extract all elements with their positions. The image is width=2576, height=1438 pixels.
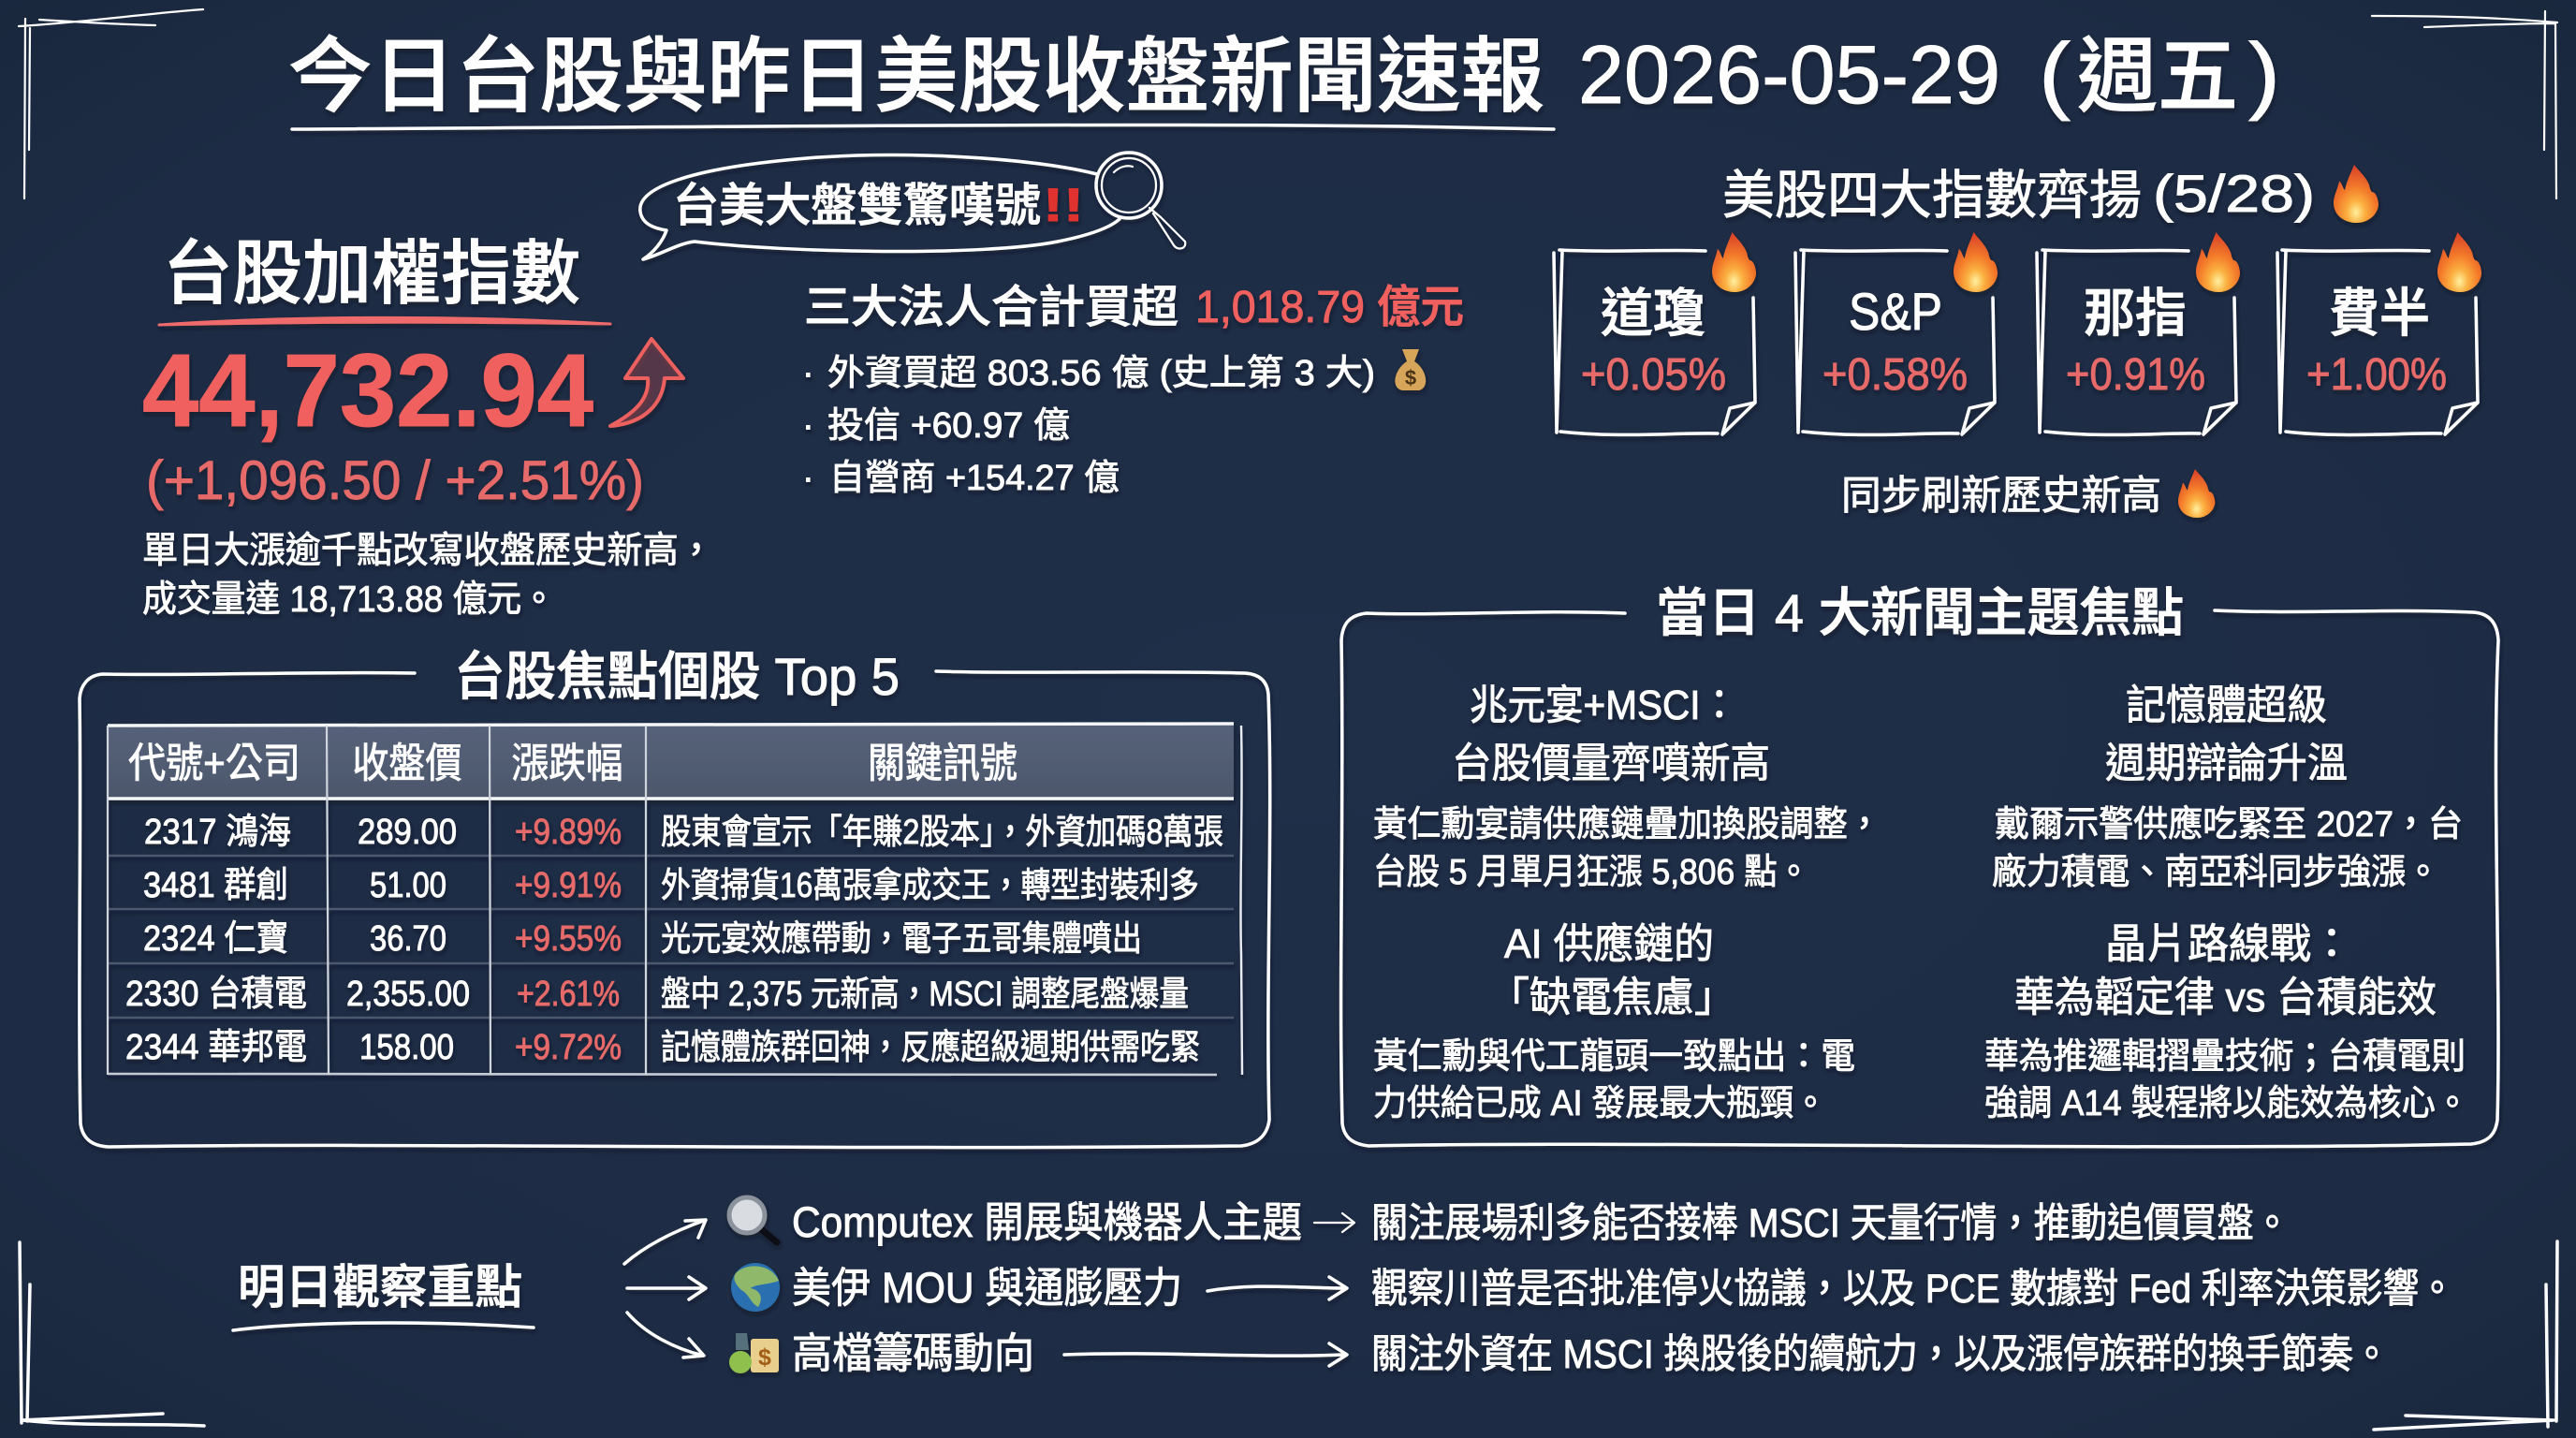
- institutional heading: [804, 283, 1464, 332]
- news: memory: 戴爾示警供應吃緊至 2027，台: [1995, 805, 2463, 844]
- item: MOU: [792, 1264, 2455, 1312]
- row 3: 2324 仁寶: [143, 919, 288, 959]
- icon: money with wings: [729, 1333, 779, 1373]
- news: memory: [1992, 682, 2463, 892]
- card: S&P: +0.58%: [1822, 350, 1968, 400]
- news: memory: 記憶體超級: [2126, 682, 2327, 728]
- row 5: +9.72%: [515, 1028, 622, 1067]
- news: MSCI: 兆元宴+MSCI：: [1470, 682, 1738, 728]
- card: S&P: S&P: [1849, 282, 1942, 341]
- index change: (+1,096.50 / +2.51%): [146, 450, 644, 511]
- title: 2026-05-29: [1578, 28, 2000, 121]
- row 2: [143, 866, 1199, 905]
- icon: money bag: [1395, 349, 1426, 390]
- row 3: +9.55%: [515, 919, 622, 959]
- table header: 代號+公司: [128, 741, 300, 786]
- row 5: [125, 1028, 1200, 1067]
- speech bubble: [640, 155, 1120, 259]
- row 5: 158.00: [359, 1028, 454, 1067]
- bullet list: ·: [802, 459, 814, 498]
- news: chip roadmap: [1984, 921, 2469, 1123]
- row 1: 2317 鴻海: [144, 813, 291, 852]
- item: Computex: [792, 1198, 2291, 1246]
- news: chip roadmap: 華為韜定律 vs 台積能效: [2014, 975, 2437, 1020]
- news: power shortage: 「缺電焦慮」: [1488, 975, 1735, 1020]
- row 4: +2.61%: [517, 975, 620, 1014]
- arrow: to MOU: [627, 1277, 706, 1299]
- news: power shortage: AI 供應鏈的: [1504, 921, 1714, 967]
- row 3: [143, 919, 1142, 959]
- item: MOU: 美伊 MOU 與通膨壓力: [792, 1264, 1182, 1312]
- corner bracket: top right: [2372, 11, 2557, 198]
- card: Dow: 道瓊: [1601, 284, 1705, 343]
- row 5: 2344 華邦電: [125, 1028, 307, 1067]
- row 1: 股東會宣示「年賺2股本」，外資加碼8萬張: [661, 813, 1223, 851]
- card: SOX: [2277, 232, 2481, 434]
- row 2: 3481 群創: [143, 866, 288, 905]
- speech bubble: 台美大盤雙驚嘆號: [673, 181, 1041, 231]
- corner bracket: bottom right: [2374, 1241, 2557, 1430]
- panel: institutional investors: [802, 283, 1464, 498]
- item: chips: 高檔籌碼動向: [792, 1329, 1034, 1377]
- card: Nasdaq: [2037, 232, 2240, 434]
- heading: US indices: (5/28): [2153, 164, 2315, 223]
- arrow: to Computex: [624, 1220, 706, 1264]
- card: SOX: 費半: [2329, 284, 2430, 343]
- row 5: 記憶體族群回神，反應超級週期供需吃緊: [661, 1028, 1200, 1066]
- title: [288, 26, 2280, 123]
- row 4: 2,355.00: [346, 975, 470, 1014]
- heading: taiex: 台股加權指數: [163, 234, 580, 313]
- description: [142, 531, 714, 620]
- news: memory: 廠力積電、南亞科同步強漲。: [1992, 853, 2440, 892]
- table: [108, 724, 1242, 1075]
- item: MOU: 觀察川普是否批准停火協議，以及 PCE 數據對 Fed 利率決策影響。: [1371, 1267, 2455, 1312]
- card: S&P: [1795, 232, 1998, 434]
- heading: news themes: 當日 4 大新聞主題焦點: [1656, 583, 2184, 642]
- icon: money bag: $: [1405, 366, 1416, 389]
- bullet list: ·: [802, 354, 814, 393]
- icon: up arrow: [610, 339, 683, 426]
- heading: US indices: [1722, 164, 2315, 225]
- row 1: [144, 813, 1223, 852]
- institutional heading: 1,018.79 億元: [1195, 283, 1464, 332]
- row 2: +9.91%: [515, 866, 622, 905]
- description: 成交量達 18,713.88 億元。: [142, 580, 556, 620]
- table header: 關鍵訊號: [868, 741, 1017, 786]
- news: power shortage: 力供給已成 AI 發展最大瓶頸。: [1373, 1084, 1827, 1123]
- corner bracket: top left: [19, 9, 203, 198]
- card: Dow: [1554, 232, 1756, 434]
- panel: US indices: [1554, 164, 2481, 519]
- icon: money with wings: $: [758, 1344, 771, 1371]
- institutional heading: 三大法人合計買超: [804, 283, 1178, 332]
- table header: 收盤價: [352, 741, 462, 786]
- description: 單日大漲逾千點改寫收盤歷史新高，: [142, 531, 714, 571]
- table header: 漲跌幅: [511, 741, 623, 786]
- heading: top 5: 台股焦點個股 Top 5: [454, 647, 900, 706]
- news: MSCI: 台股價量齊噴新高: [1452, 741, 1770, 786]
- title: (: [2039, 26, 2071, 122]
- card: Nasdaq: +0.91%: [2066, 350, 2205, 400]
- heading underline: [233, 1323, 534, 1330]
- row 2: 外資掃貨16萬張拿成交王，轉型封裝利多: [661, 866, 1199, 904]
- row 4: [125, 975, 1189, 1014]
- index value: 44,732.94: [142, 333, 593, 448]
- title underline: [292, 125, 1554, 129]
- icon: magnifying glass: [1096, 153, 1185, 248]
- panel: top 5 stocks: [80, 647, 1270, 1148]
- icon: flame: [2334, 165, 2378, 223]
- row 4: 盤中 2,375 元新高，MSCI 調整尾盤爆量: [661, 975, 1189, 1013]
- card: SOX: +1.00%: [2306, 350, 2447, 400]
- news: chip roadmap: 華為推邏輯摺疊技術；台積電則: [1984, 1037, 2466, 1077]
- card: Nasdaq: 那指: [2084, 284, 2187, 343]
- corner bracket: bottom left: [20, 1242, 204, 1426]
- news: power shortage: 黃仁勳與代工龍頭一致點出：電: [1373, 1037, 1855, 1077]
- heading underline: [159, 317, 610, 325]
- news: chip roadmap: 晶片路線戰：: [2105, 921, 2352, 967]
- row 3: 36.70: [370, 919, 446, 959]
- note: record highs: 同步刷新歷史新高: [1841, 474, 2161, 519]
- row 4: 2330 台積電: [125, 975, 307, 1014]
- bullet list: [802, 354, 1375, 498]
- panel border: [80, 671, 1270, 1148]
- heading: US indices: 美股四大指數齊揚: [1722, 166, 2142, 225]
- news: chip roadmap: 強調 A14 製程將以能效為核心。: [1984, 1084, 2469, 1123]
- bullet list: 自營商 +154.27 億: [829, 459, 1120, 498]
- bullet list: 投信 +60.97 億: [827, 406, 1070, 446]
- icon: magnifier: [729, 1197, 777, 1242]
- panel: tomorrow watch: [233, 1197, 2455, 1377]
- item: Computex: Computex 開展與機器人主題: [792, 1198, 1302, 1246]
- news: MSCI: 黃仁勳宴請供應鏈疊加換股調整，: [1373, 805, 1881, 844]
- title: 今日台股與昨日美股收盤新聞速報: [288, 30, 1544, 123]
- news: power shortage: [1373, 921, 1855, 1123]
- panel: 4 news themes: [1341, 583, 2498, 1147]
- panel: taiex: [142, 234, 714, 620]
- news: MSCI: [1373, 682, 1881, 892]
- row 1: +9.89%: [515, 813, 622, 852]
- news: MSCI: 台股 5 月單月狂漲 5,806 點。: [1373, 853, 1810, 892]
- row 2: 51.00: [370, 866, 446, 905]
- item: chips: 關注外資在 MSCI 換股後的續航力，以及漲停族群的換手節奏。: [1371, 1332, 2390, 1377]
- title: ): [2248, 26, 2280, 122]
- card: Dow: +0.05%: [1581, 350, 1726, 400]
- item: chips: [792, 1329, 2390, 1377]
- table header: [108, 726, 1234, 799]
- speech bubble: !!: [1043, 179, 1084, 231]
- heading: tomorrow watch: 明日觀察重點: [238, 1261, 522, 1313]
- icon: globe: [731, 1263, 780, 1312]
- bullet list: ·: [802, 406, 814, 446]
- title: 週五: [2077, 30, 2238, 123]
- arrow: to chips: [627, 1313, 704, 1357]
- item: Computex: 關注展場利多能否接棒 MSCI 天量行情，推動追價買盤。: [1371, 1201, 2291, 1246]
- row 1: 289.00: [358, 813, 457, 852]
- panel border: [1341, 610, 2498, 1147]
- bullet list: 外資買超 803.56 億 (史上第 3 大): [827, 354, 1375, 393]
- news: memory: 週期辯論升溫: [2105, 741, 2348, 786]
- row 3: 光元宴效應帶動，電子五哥集體噴出: [661, 919, 1142, 958]
